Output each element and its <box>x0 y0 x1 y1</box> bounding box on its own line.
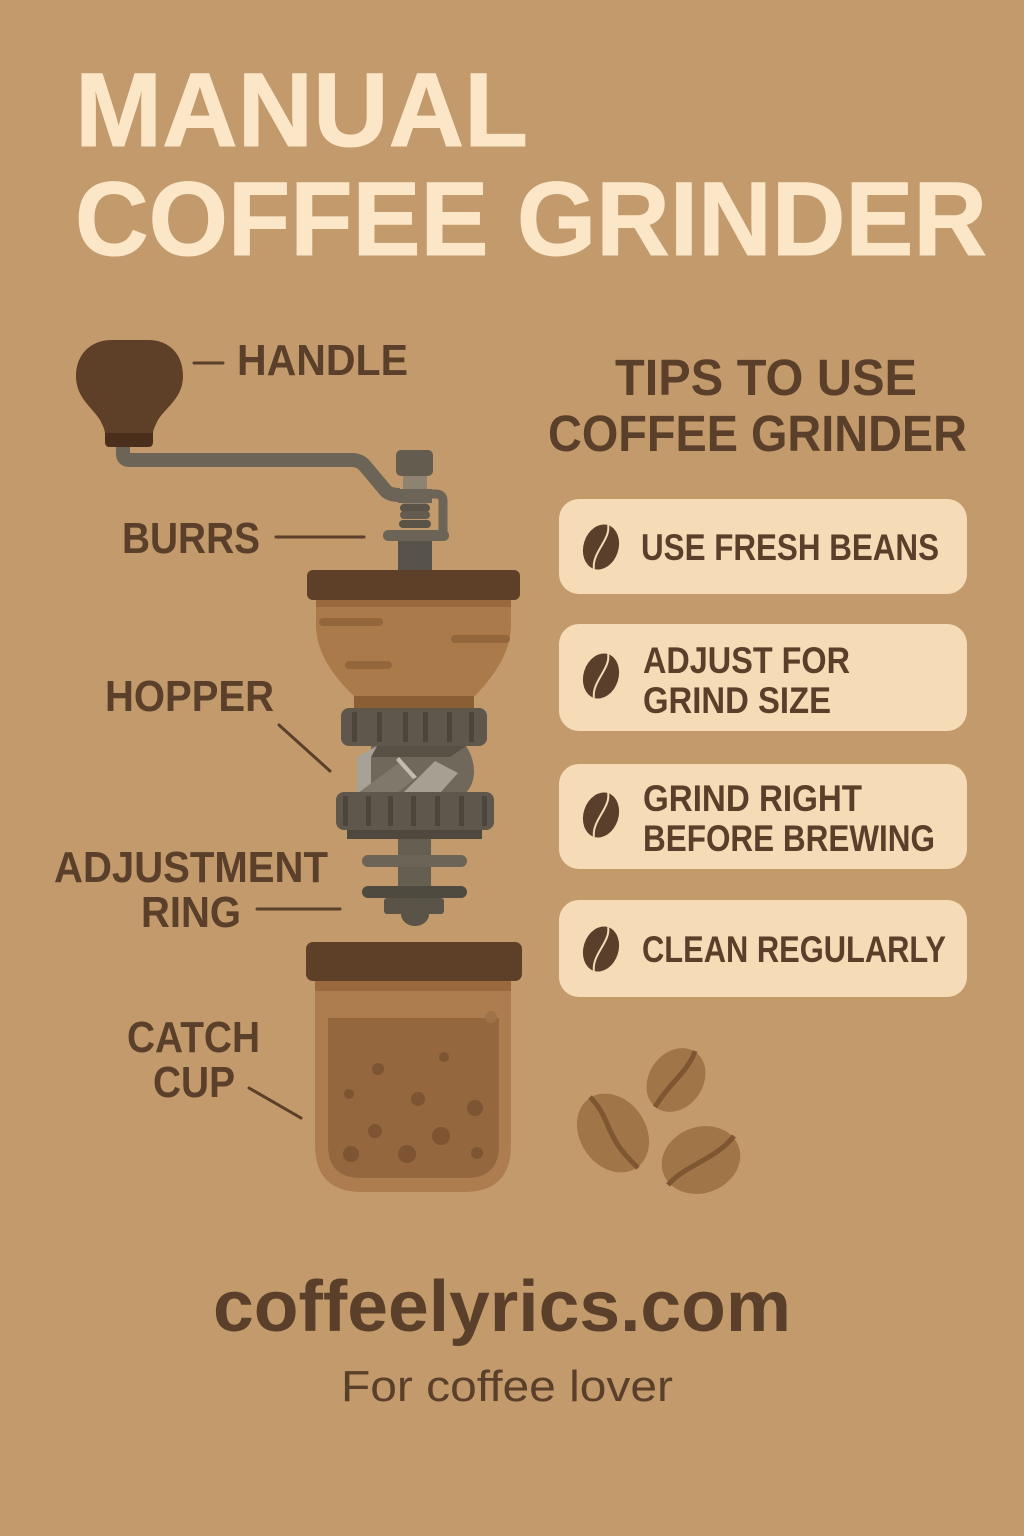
part labels: ADJUSTMENT <box>54 843 328 892</box>
tip card: adjust for grind size <box>559 624 967 731</box>
tip card: clean regularly: CLEAN REGULARLY <box>642 929 946 970</box>
hopper <box>307 570 520 709</box>
tip card: use fresh beans <box>559 499 967 594</box>
tip card: grind right before brewing: BEFORE BREWING <box>643 818 935 859</box>
adjustment rings <box>336 708 494 839</box>
tip card: adjust for grind size: ADJUST FOR <box>643 640 850 681</box>
part labels: HANDLE <box>237 336 408 385</box>
tips heading <box>548 349 967 462</box>
part labels: CATCH <box>127 1013 260 1062</box>
tip card: grind right before brewing <box>559 764 967 869</box>
tips heading: TIPS TO USE <box>615 349 917 406</box>
tips heading: COFFEE GRINDER <box>548 405 967 462</box>
tagline: For coffee lover <box>341 1362 673 1411</box>
catch cup <box>306 942 522 1192</box>
website footer: coffeelyrics.com <box>213 1267 791 1347</box>
part labels: CUP <box>153 1058 235 1107</box>
tip card: grind right before brewing: GRIND RIGHT <box>643 778 862 819</box>
icon: coffee beans <box>562 1037 750 1205</box>
tip card: use fresh beans: USE FRESH BEANS <box>641 527 939 568</box>
title: MANUAL <box>75 52 528 169</box>
part label lines <box>194 363 364 1118</box>
title <box>75 52 987 278</box>
grinder illustration <box>76 340 522 1192</box>
handle arm <box>123 447 443 532</box>
tip card: adjust for grind size: GRIND SIZE <box>643 680 831 721</box>
part labels: HOPPER <box>105 672 274 721</box>
part labels <box>54 336 408 1107</box>
part labels: BURRS <box>122 514 260 563</box>
part labels: RING <box>141 888 241 937</box>
title: COFFEE GRINDER <box>75 161 987 278</box>
handle knob <box>76 340 183 447</box>
tip card: clean regularly <box>559 900 967 997</box>
top nut and shaft <box>383 450 449 572</box>
burrs <box>357 746 474 795</box>
lower shaft <box>362 839 467 926</box>
